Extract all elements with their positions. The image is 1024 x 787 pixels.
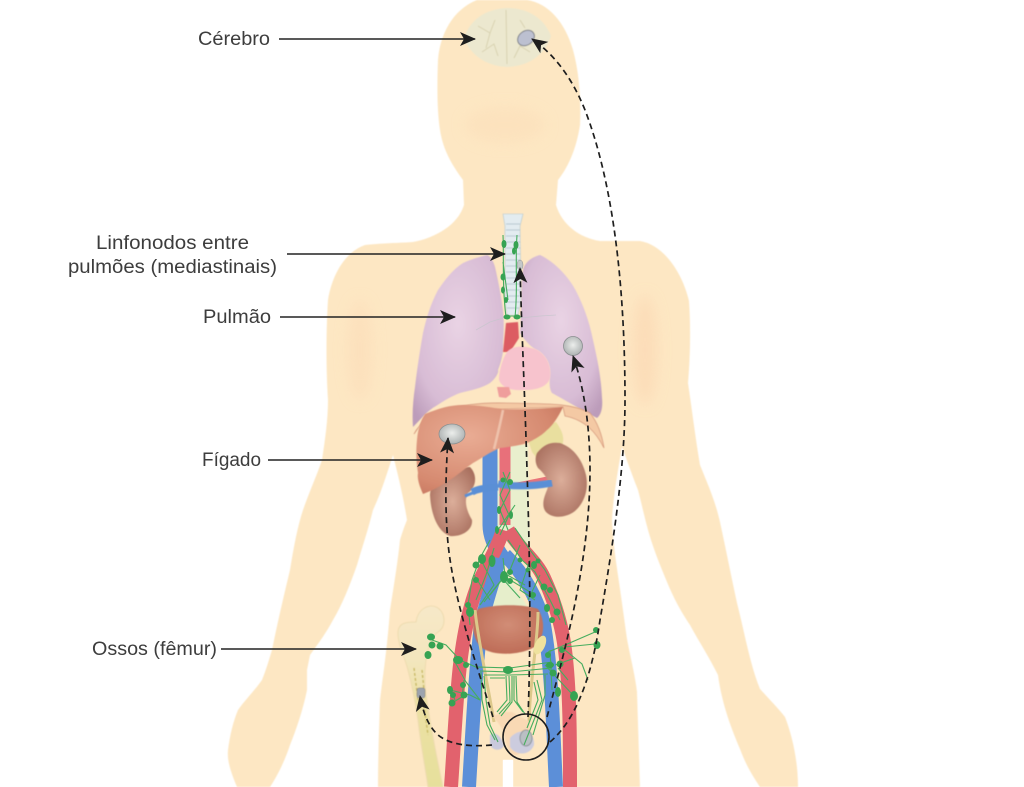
iliac arteries bbox=[451, 530, 570, 787]
right kidney bbox=[536, 443, 587, 517]
dashed arrow: lung bbox=[547, 356, 590, 717]
label: Linfonodos: Linfonodos entre bbox=[96, 233, 249, 254]
metastasis circle bbox=[503, 714, 549, 760]
label: Ossos: Ossos (fêmur) bbox=[92, 639, 217, 660]
tumour: liver bbox=[439, 424, 465, 444]
prostate bbox=[531, 634, 549, 656]
dashed arrow: mediastinum bbox=[520, 268, 530, 717]
body silhouette bbox=[228, 0, 798, 787]
left kidney bbox=[430, 467, 475, 536]
label: Linfonodos: pulmões (mediastinais) bbox=[68, 257, 277, 278]
trachea bbox=[503, 214, 523, 315]
lymphatic vessels bbox=[432, 235, 595, 745]
left lung bbox=[413, 255, 504, 427]
lung bronchial detail bbox=[476, 315, 556, 330]
pale abdominal background bbox=[497, 445, 530, 550]
label: Pulmão: Pulmão bbox=[203, 307, 271, 328]
label: Linfonodos bbox=[68, 233, 505, 278]
adrenal fat bbox=[528, 422, 563, 462]
label: Fígado: Fígado bbox=[202, 450, 261, 471]
dashed arrow: femur bbox=[420, 696, 492, 746]
heart bbox=[497, 347, 550, 398]
lymph nodes bbox=[424, 240, 600, 706]
tumour: brain bbox=[515, 27, 537, 49]
tumour: testicle bbox=[520, 730, 532, 746]
aorta upper bbox=[500, 440, 510, 525]
iliac veins bbox=[469, 555, 556, 787]
brain bbox=[464, 8, 551, 67]
tumour: lung bbox=[564, 336, 582, 356]
tumour: femur bbox=[417, 688, 425, 698]
diaphragm bbox=[414, 403, 604, 448]
dashed arrow: liver bbox=[446, 438, 493, 717]
genital structures bbox=[490, 712, 534, 755]
femur bbox=[398, 606, 444, 787]
dashed arrow: brain bbox=[532, 39, 625, 742]
aorta arch bbox=[503, 322, 519, 352]
renal artery bbox=[510, 478, 550, 486]
pale pelvic triangle bbox=[486, 567, 528, 607]
label: Cérebro: Cérebro bbox=[198, 29, 270, 50]
tumour: trachea bbox=[517, 260, 523, 270]
liver bbox=[416, 405, 563, 494]
renal veins bbox=[465, 483, 552, 496]
bladder bbox=[473, 605, 543, 654]
vena cava and iliac veins bbox=[490, 440, 503, 558]
vas deferens bbox=[475, 610, 538, 722]
right lung bbox=[520, 255, 602, 418]
